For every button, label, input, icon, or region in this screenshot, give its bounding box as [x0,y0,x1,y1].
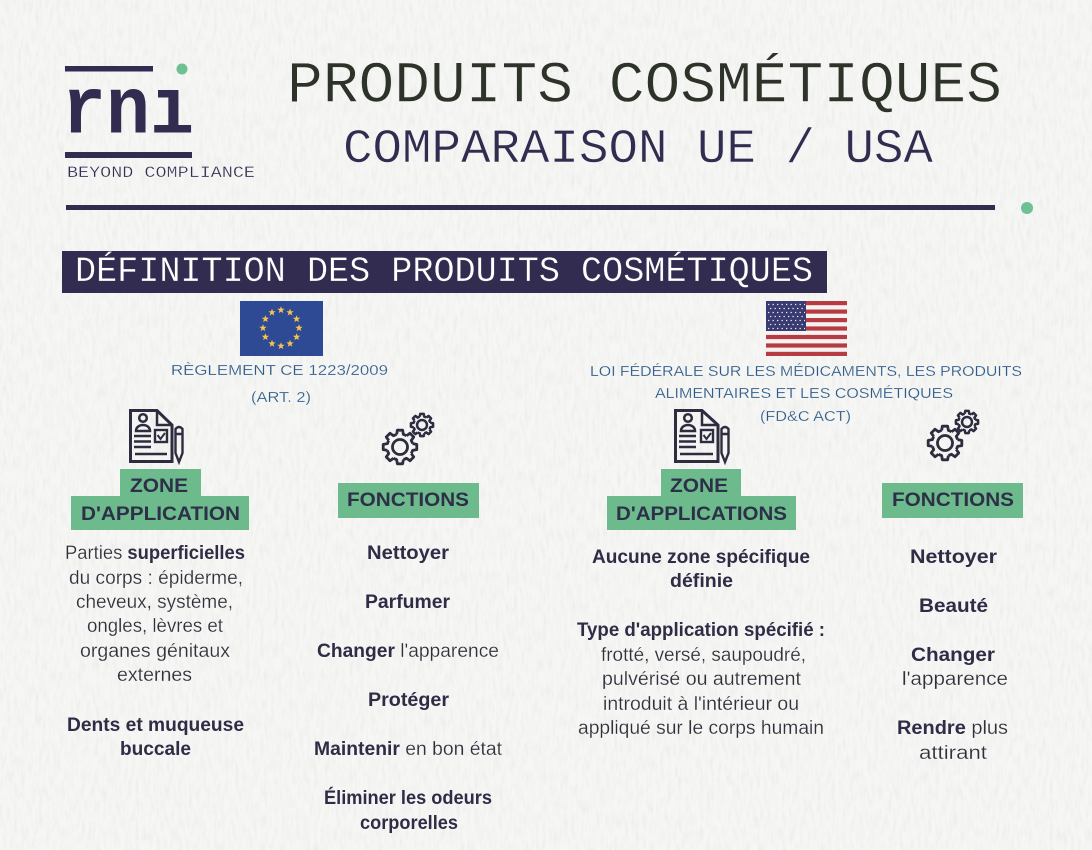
text: zone d'application UE: Parties superficielles [65,543,245,564]
title: PRODUITS COSMÉTIQUES [287,54,1002,120]
section banner: définition: DÉFINITION DES PRODUITS COSMÉTIQUES [75,251,813,292]
label: zone d'applications USA: ZONE [670,476,728,497]
label: zone d'applications USA [607,469,796,530]
text: zone d'applications USA: pulvérisé ou autrement [602,669,802,690]
text: zone d'application UE: Dents et muqueuse [67,715,244,736]
text: loi USA: (FD&C ACT) [760,409,851,425]
label: zone d'applications USA: D'APPLICATIONS [616,504,787,525]
text: zone d'applications USA: Aucune zone spécifique [592,547,810,568]
text: fonctions UE: Maintenir en bon état [314,739,503,760]
text: zone d'applications USA: Type d'application spécifié : [577,620,825,641]
text: zone d'application UE: organes génitaux [80,641,231,662]
label: fonctions UE: FONCTIONS [347,490,469,511]
text: fonctions UE: Parfumer [365,592,451,613]
text: règlement UE: RÈGLEMENT CE 1223/2009 [171,362,388,379]
text: zone d'applications USA: introduit à l'intérieur ou [603,694,799,715]
text: fonctions UE: Protéger [368,690,450,711]
text: fonctions UE: Nettoyer [367,543,450,564]
text: zone d'application UE: du corps : épiderme, [69,568,243,589]
text: zone d'applications USA: définie [670,571,733,592]
text: fonctions USA: l'apparence [902,669,1008,690]
label: fonctions USA: FONCTIONS [892,490,1014,511]
title: COMPARAISON UE / USA [343,122,934,177]
label: fonctions USA [882,483,1023,518]
logo: RNI beyond compliance: BEYOND COMPLIANCE [67,164,255,182]
text: zone d'application UE: externes [117,665,192,686]
label: zone d'application UE: D'APPLICATION [81,504,240,525]
text: loi USA: ALIMENTAIRES ET LES COSMÉTIQUES [655,385,953,402]
logo: RNI beyond compliance [62,64,255,182]
text: loi USA [590,363,1022,425]
icon: gears USA [928,411,978,460]
text: fonctions USA: Rendre plus [897,718,1008,739]
text: règlement UE [171,362,388,406]
text: loi USA: LOI FÉDÉRALE SUR LES MÉDICAMENTS, LES PRODUITS [590,363,1022,380]
text: zone d'application UE: ongles, lèvres et [87,616,224,637]
text: fonctions USA: Changer [911,645,996,666]
text: zone d'application UE: cheveux, système, [76,592,233,613]
text: règlement UE: (ART. 2) [251,390,311,406]
text: zone d'application UE [65,543,245,760]
text: fonctions UE: corporelles [360,813,458,834]
label: fonctions UE [338,483,479,518]
icon: document USA [676,410,728,462]
label: zone d'application UE: ZONE [130,476,188,497]
text: zone d'application UE: buccale [120,739,191,760]
label: zone d'application UE [71,469,249,530]
icon: gears UE [383,414,433,464]
icon: document UE [130,410,182,462]
header divider with dot [66,202,1033,214]
text: zone d'applications USA [577,547,825,739]
text: fonctions USA: Nettoyer [910,547,998,568]
text: zone d'applications USA: frotté, versé, saupoudré, [601,645,806,666]
text: fonctions UE: Changer l'apparence [317,641,499,662]
text: fonctions UE [314,543,503,834]
logo: RNI beyond compliance: rni [62,66,194,158]
text: fonctions USA: attirant [919,743,988,764]
icon: EU flag [240,301,323,356]
title [287,54,1002,177]
icon: US flag [766,301,847,356]
text: zone d'applications USA: appliqué sur le corps humain [578,718,824,739]
text: fonctions USA [897,547,1008,764]
text: fonctions USA: Beauté [919,596,988,617]
text: fonctions UE: Éliminer les odeurs [324,787,492,809]
